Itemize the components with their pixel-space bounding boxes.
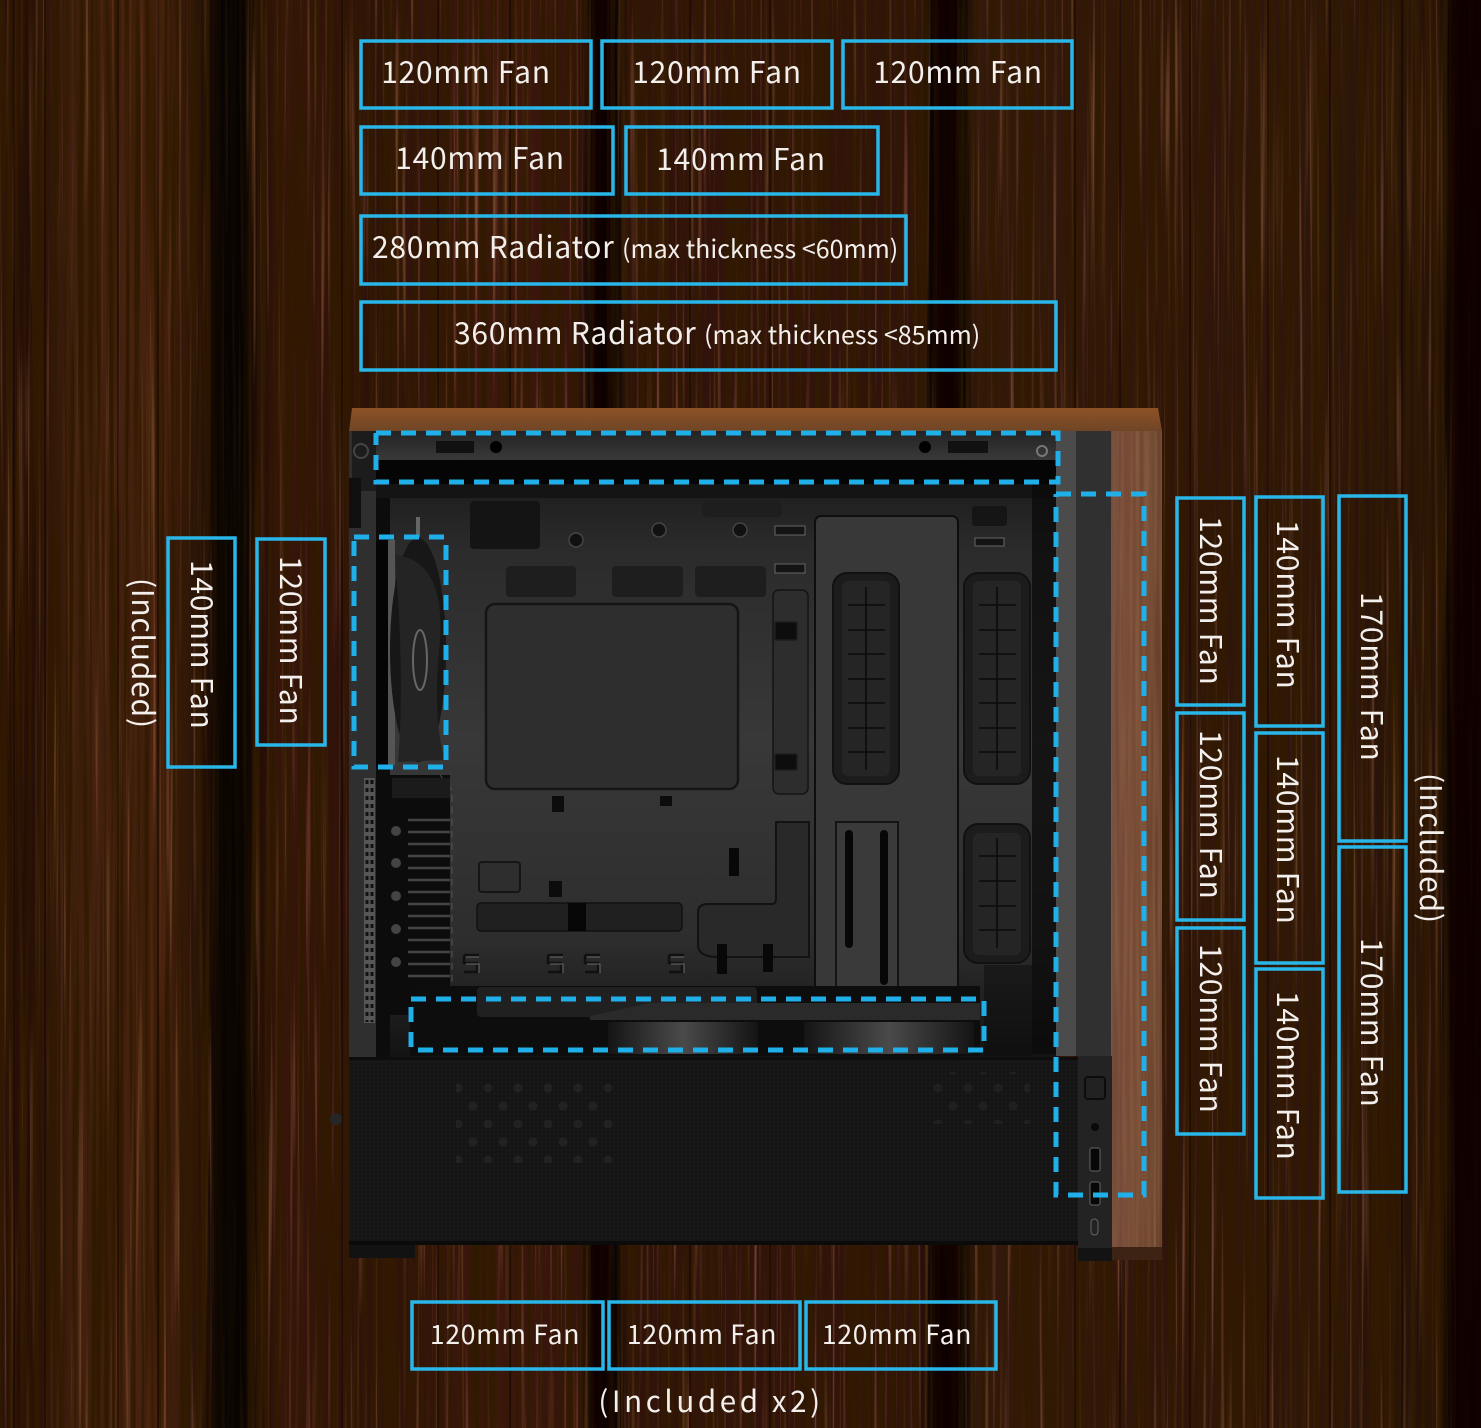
- 170mm front slot 2: 170mm Fan: [1352, 938, 1396, 1108]
- 120mm bottom slot 1: [412, 1302, 603, 1369]
- included note front: (Included): [1411, 773, 1455, 924]
- top wood panel: [349, 408, 1162, 431]
- dashed zone: front mount: [1056, 494, 1144, 1195]
- front fan labels: [1177, 496, 1455, 1198]
- 120mm bottom slot 2: 120mm Fan: [627, 1313, 777, 1352]
- 140mm fan slot 2: [626, 127, 878, 194]
- bottom intake fans: [410, 986, 980, 1056]
- upper right small slots: [972, 506, 1007, 546]
- 120mm front slot 1: 120mm Fan: [1191, 516, 1235, 686]
- 140mm front slot 1: 140mm Fan: [1268, 520, 1312, 690]
- 120mm rear fan: 120mm Fan: [271, 556, 315, 726]
- 120mm front slot 2: [1177, 713, 1244, 920]
- 170mm front slot 2: [1339, 847, 1406, 1192]
- CPU cutout: [486, 604, 738, 789]
- T-shaped cable cutout: [698, 822, 809, 957]
- 140mm front slot 3: [1256, 969, 1323, 1198]
- dashed zone: bottom mount: [411, 999, 984, 1050]
- 140mm front slot 3: 140mm Fan: [1268, 991, 1312, 1161]
- PC case interior photo: [330, 408, 1162, 1261]
- 120mm bottom slot 1: 120mm Fan: [430, 1313, 580, 1352]
- 140mm front slot 1: [1256, 497, 1323, 726]
- 360mm radiator label: 360mm Radiator (max thickness <85mm): [454, 309, 980, 353]
- right vertical frame: [1032, 431, 1111, 1056]
- 140mm fan slot 2: 140mm Fan: [656, 135, 826, 179]
- 120mm front slot 3: [1177, 928, 1244, 1134]
- 280mm radiator label: 280mm Radiator (max thickness <60mm): [372, 223, 898, 267]
- 120mm fan slot 3: [843, 41, 1072, 108]
- upper cable cutouts: [470, 501, 782, 597]
- front fan bracket shadow: [984, 965, 1032, 1056]
- vertical cable slot: [773, 526, 808, 794]
- 120mm fan slot 2: 120mm Fan: [632, 48, 802, 92]
- top support: fan and radiator size labels: [361, 41, 1072, 370]
- grommet standoffs: [569, 523, 747, 547]
- 170mm front slot 1: [1339, 496, 1406, 841]
- 120mm fan slot 2: [602, 41, 832, 108]
- 140mm rear fan: 140mm Fan: [182, 560, 226, 730]
- tray clips and small slots: [464, 796, 773, 974]
- included note rear: (Included): [123, 578, 167, 729]
- lower tray cutouts: [477, 862, 682, 931]
- drive bracket: [836, 822, 898, 990]
- 140mm fan slot 1: 140mm Fan: [395, 134, 565, 178]
- 120mm fan slot 1: 120mm Fan: [381, 48, 551, 92]
- 120mm front slot 2: 120mm Fan: [1191, 730, 1235, 900]
- top bar and dark gap: [354, 431, 1056, 498]
- cable tie grommet lower: [964, 824, 1030, 963]
- cable tie grommet left: [833, 573, 899, 784]
- 140mm fan slot 1: [361, 127, 613, 194]
- 280mm radiator label: [361, 216, 906, 284]
- 120mm rear fan: [257, 539, 325, 745]
- 170mm front slot 1: 170mm Fan: [1352, 592, 1396, 762]
- 360mm radiator label: [361, 302, 1056, 370]
- dashed zone: rear mount: [354, 537, 446, 767]
- PSU shroud: [330, 1057, 1078, 1258]
- cable tie grommet right: [964, 573, 1030, 784]
- 140mm front slot 2: [1256, 733, 1323, 963]
- 120mm bottom slot 2: [609, 1302, 800, 1369]
- dashed zone: top mount: [376, 433, 1058, 482]
- 120mm front slot 1: [1177, 498, 1244, 705]
- case rear frame: [349, 431, 390, 1057]
- right wood panel: [1111, 431, 1162, 1260]
- drive mounting panel: [815, 516, 958, 1056]
- rear fan labels: [123, 538, 325, 767]
- 140mm rear fan: [168, 538, 235, 767]
- PCIe bracket area: [364, 775, 452, 1023]
- 120mm fan slot 3: 120mm Fan: [873, 48, 1043, 92]
- 120mm bottom slot 3: [806, 1302, 996, 1369]
- front I/O panel: [1078, 1056, 1112, 1261]
- motherboard tray: [390, 480, 1058, 1057]
- 120mm bottom slot 3: 120mm Fan: [822, 1313, 972, 1352]
- bottom fan labels: [412, 1302, 996, 1421]
- included x2 note: (Included x2): [598, 1379, 824, 1421]
- 140mm front slot 2: 140mm Fan: [1268, 755, 1312, 925]
- 120mm front slot 3: 120mm Fan: [1191, 944, 1235, 1114]
- rear exhaust fan: [376, 517, 446, 765]
- 120mm fan slot 1: [361, 41, 591, 108]
